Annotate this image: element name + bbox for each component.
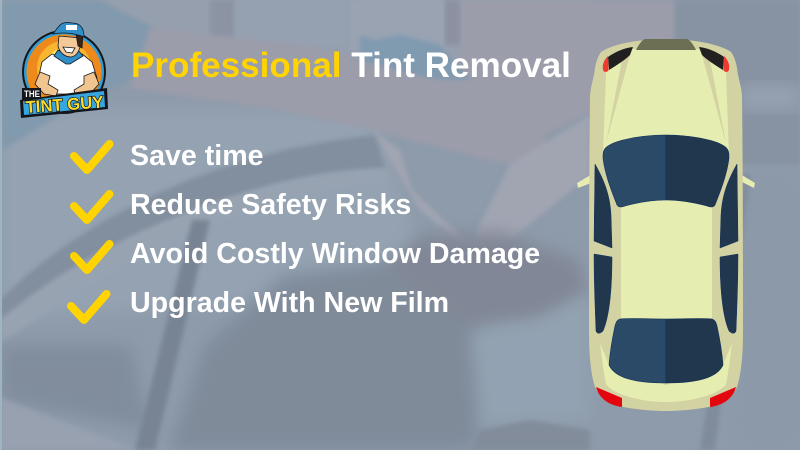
logo banner: THE [24, 89, 40, 100]
headlights [603, 47, 729, 72]
side mirrors [577, 172, 755, 188]
windshield [603, 135, 729, 207]
check item: Save time [70, 140, 264, 174]
hood crease lines [606, 55, 726, 143]
logo mascot body [35, 22, 99, 97]
rear window [609, 319, 723, 383]
roof highlight [621, 195, 712, 325]
title: Professional Tint Removal [131, 46, 571, 85]
tail lights [596, 387, 736, 407]
logo sun badge [22, 30, 106, 114]
check item: Reduce Safety Risks: Reduce Safety Risks [130, 189, 411, 221]
car body [589, 40, 743, 411]
check item: Save time: Save time [130, 140, 264, 172]
check item: Avoid Costly Window Damage: Avoid Costly Window Damage [130, 238, 540, 270]
hood highlight [603, 49, 729, 155]
check item: Upgrade With New Film: Upgrade With New Film [130, 287, 449, 319]
front grille [636, 39, 696, 50]
checklist [67, 140, 540, 324]
side windows [594, 164, 738, 333]
trunk highlight [600, 343, 732, 402]
logo banner: TINT GUY [25, 93, 105, 117]
